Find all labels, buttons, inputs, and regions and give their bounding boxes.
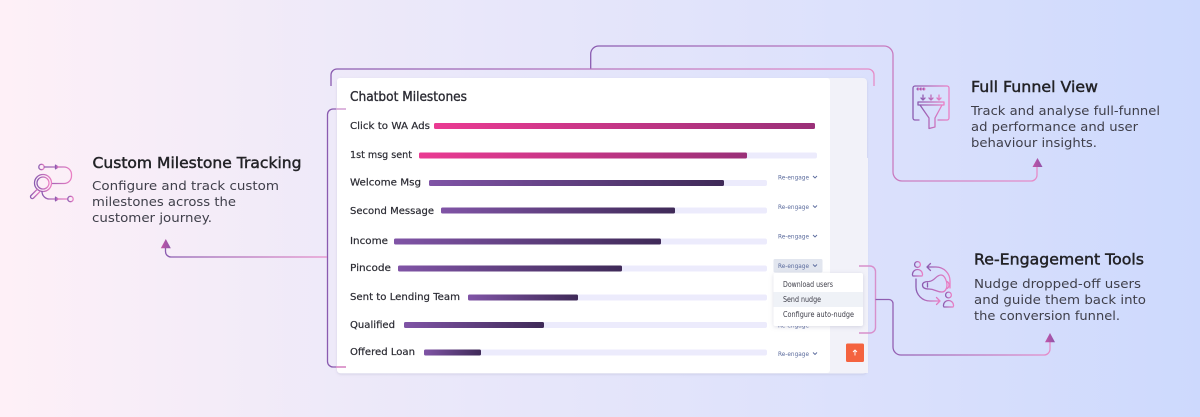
row: Sent to Lending Team	[350, 292, 767, 303]
icon: megaphone with users	[912, 262, 954, 307]
text block: Full Funnel View: ad performance and user	[971, 119, 1139, 134]
text block: Custom Milestone Tracking: Configure and track custom	[92, 178, 279, 193]
row: Welcome Msg	[350, 178, 767, 188]
text block: Re-Engagement Tools: Re-Engagement Tools	[974, 250, 1144, 268]
row: Sent to Lending Team: Sent to Lending Team	[350, 292, 460, 303]
text block: Custom Milestone Tracking: milestones across the	[92, 194, 236, 209]
row: Offered Loan	[350, 347, 767, 358]
re-engage controls: Re-engage	[778, 322, 809, 330]
text block: Full Funnel View	[970, 78, 1160, 150]
dropdown menu: Send nudge	[783, 295, 821, 304]
connector: left bracket to Custom Milestone Tracking	[161, 109, 346, 367]
text block: Full Funnel View: Full Funnel View	[971, 78, 1098, 96]
re-engage controls: Re-engage	[778, 232, 809, 240]
row: Click to WA Ads	[350, 121, 815, 132]
dropdown menu: Configure auto-nudge	[783, 310, 854, 319]
row: Pincode: Pincode	[350, 263, 391, 274]
row: Welcome Msg: Welcome Msg	[350, 178, 421, 188]
re-engage controls: Re-engage	[778, 350, 809, 358]
row: Second Message	[350, 206, 767, 217]
button: scroll up	[846, 344, 864, 362]
connector: right bracket to Re-Engagement Tools	[859, 266, 1055, 355]
text block: Full Funnel View: behaviour insights.	[971, 135, 1097, 150]
icon: milestone magnifier	[30, 164, 73, 202]
row: Pincode	[350, 263, 767, 274]
text block: Re-Engagement Tools: and guide them back into	[974, 292, 1146, 307]
text block: Re-Engagement Tools: Nudge dropped-off users	[974, 276, 1141, 291]
text block: Re-Engagement Tools	[974, 250, 1146, 323]
re-engage controls: Re-engage	[778, 174, 809, 182]
re-engage controls: Re-engage	[778, 203, 809, 211]
heading: Chatbot Milestones: Chatbot Milestones	[350, 90, 467, 105]
row: Income	[350, 236, 767, 247]
row: Qualified: Qualified	[350, 320, 395, 331]
row: Second Message: Second Message	[350, 206, 434, 217]
row: Offered Loan: Offered Loan	[350, 347, 415, 358]
re-engage controls	[774, 174, 822, 358]
text block: Full Funnel View: Track and analyse full-funnel	[970, 103, 1160, 118]
text block: Custom Milestone Tracking: customer journey.	[92, 210, 212, 225]
row: 1st msg sent	[350, 150, 817, 161]
row: Income: Income	[350, 236, 388, 247]
row: Click to WA Ads: Click to WA Ads	[350, 121, 430, 132]
text block: Custom Milestone Tracking	[92, 154, 302, 225]
row: Qualified	[350, 320, 767, 331]
row: 1st msg sent: 1st msg sent	[350, 150, 412, 161]
icon: funnel in browser window	[913, 86, 949, 128]
text block: Re-Engagement Tools: the conversion funnel.	[974, 308, 1120, 323]
connector: bracket above panel	[331, 69, 874, 86]
dropdown menu: Download users	[783, 280, 833, 289]
connector: top outer line to Full Funnel View	[591, 46, 1042, 181]
text block: Custom Milestone Tracking: Custom Milestone Tracking	[92, 154, 302, 172]
panel: chatbot milestones	[337, 78, 868, 374]
re-engage controls: Re-engage	[778, 262, 809, 270]
dropdown menu	[774, 273, 863, 326]
